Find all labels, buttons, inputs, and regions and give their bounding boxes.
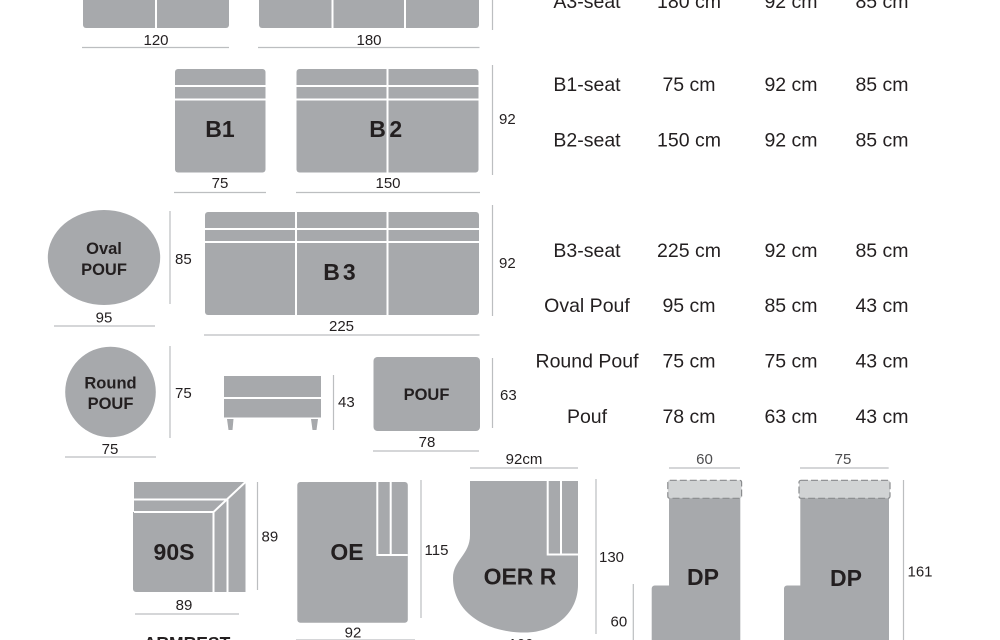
diagram: OE module: [296, 480, 448, 640]
diagram: round pouf: [65, 346, 192, 458]
diagram: DP module 75: 75: [835, 451, 851, 468]
row: Round Pouf: 75 cm: [662, 350, 716, 372]
table: module dimensions: [536, 0, 909, 428]
row: Oval Pouf: 85 cm: [764, 295, 818, 317]
diagram: B3 module: B3: [323, 259, 359, 285]
diagram: 90S corner module: 89: [176, 597, 192, 614]
diagram: pouf top view: 63: [500, 387, 517, 404]
diagram: B3 module: [204, 205, 516, 335]
row: B2-seat: 85 cm: [855, 130, 909, 152]
row: Oval Pouf: 43 cm: [855, 295, 909, 317]
diagram: B1 module: B1: [205, 116, 235, 142]
diagram: B2 module: 92: [499, 111, 516, 128]
diagram: pouf top view: POUF: [404, 386, 449, 404]
diagram: DP module 60: 60: [610, 614, 627, 630]
row: Pouf: [567, 406, 909, 428]
row: Round Pouf: 75 cm: [764, 350, 818, 372]
row: Oval Pouf: Oval Pouf: [544, 295, 630, 317]
diagram: A2 module: 120: [143, 32, 169, 49]
row: A3-seat: [553, 0, 909, 13]
diagram: A2 module: [82, 0, 229, 49]
diagram: 90S corner module: 89: [262, 528, 278, 546]
row: Pouf: 63 cm: [764, 406, 818, 428]
diagram: DP module 75: DP: [830, 565, 862, 591]
diagram: oval pouf: [48, 210, 192, 326]
row: B3-seat: B3-seat: [553, 240, 621, 262]
row: B2-seat: 150 cm: [657, 130, 721, 152]
diagram: B2 module: [296, 65, 516, 192]
diagram: DP module 60: 60: [696, 451, 713, 468]
row: Round Pouf: [536, 350, 909, 372]
diagram: B3 module: 92: [499, 255, 516, 272]
diagram: A3 module: 180: [356, 32, 382, 49]
diagram: OER R module: OER R: [484, 564, 557, 590]
diagram: oval pouf: 85: [175, 251, 192, 268]
diagram: B1 module: 75: [212, 175, 228, 192]
row: Oval Pouf: 95 cm: [662, 295, 716, 317]
row: B2-seat: [553, 130, 909, 152]
diagram: pouf side view: 43: [338, 394, 355, 411]
diagram: round pouf: 75: [175, 385, 192, 402]
diagram: oval pouf: 95: [96, 310, 112, 326]
diagram: DP module 75: [784, 451, 933, 640]
row: B2-seat: B2-seat: [553, 130, 621, 152]
diagram: A3 module: [258, 0, 492, 49]
row: B2-seat: 92 cm: [764, 130, 818, 152]
diagram: pouf top view: [373, 357, 517, 451]
diagram: round pouf: Round: [84, 374, 137, 392]
diagram: round pouf: 75: [102, 441, 118, 458]
row: B1-seat: B1-seat: [553, 74, 621, 96]
diagram: pouf side view: [224, 375, 355, 430]
row: B3-seat: [553, 240, 909, 262]
diagram: 90S corner module: 90S: [154, 539, 194, 565]
diagram: OE module: OE: [330, 539, 364, 565]
row: B1-seat: 85 cm: [855, 74, 909, 96]
diagram: round pouf: POUF: [88, 395, 133, 413]
diagram: 90S corner module: [133, 482, 278, 614]
diagram: OER R module: 92cm: [506, 451, 542, 468]
row: Oval Pouf: [544, 295, 909, 317]
diagram: oval pouf: POUF: [81, 261, 127, 279]
diagram: OER R module: 130: [599, 549, 624, 566]
row: B3-seat: 85 cm: [855, 240, 909, 262]
row: Pouf: Pouf: [567, 406, 608, 428]
diagram: B2 module: B2: [369, 116, 406, 142]
diagram: OER R module: [453, 451, 624, 640]
diagram: DP module 60: [610, 451, 742, 640]
diagram: DP module 60: DP: [687, 564, 719, 590]
row: Pouf: 43 cm: [855, 406, 909, 428]
row: Round Pouf: Round Pouf: [536, 350, 639, 372]
row: B1-seat: 75 cm: [662, 74, 716, 96]
diagram: B1 module: [174, 69, 266, 192]
diagram: B3 module: 225: [329, 318, 354, 335]
row: Round Pouf: 43 cm: [855, 350, 909, 372]
row: Pouf: 78 cm: [662, 406, 716, 428]
diagram: pouf top view: 78: [419, 434, 435, 451]
row: B3-seat: 92 cm: [764, 240, 818, 262]
row: B1-seat: 92 cm: [764, 74, 818, 96]
row: B3-seat: 225 cm: [657, 240, 721, 262]
row: B1-seat: [553, 74, 909, 96]
diagram: oval pouf: Oval: [86, 240, 122, 258]
diagram: B2 module: 150: [375, 175, 401, 192]
diagram: DP module 75: 161: [908, 564, 933, 580]
diagram: OE module: 115: [424, 542, 448, 559]
